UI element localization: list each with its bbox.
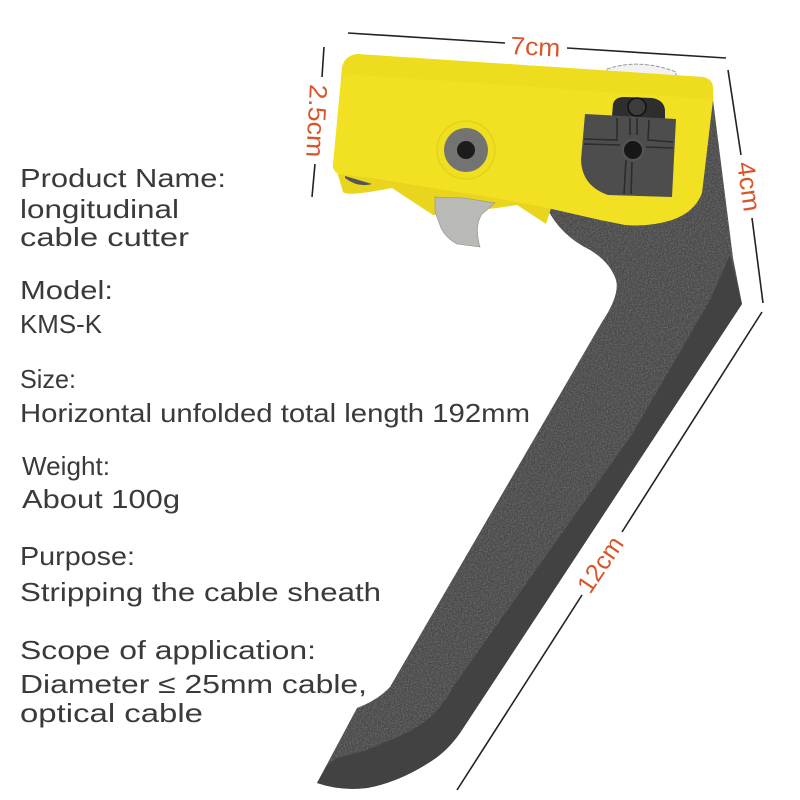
spec text: purpose: Purpose: (20, 541, 135, 571)
dimension: 7cm: 7cm (510, 32, 561, 63)
pivot screw (437, 121, 495, 179)
dimension: 4cm: 4cm (731, 160, 766, 213)
dimension: 2.5cm: 2.5cm (300, 84, 332, 158)
spec text: size: Size: (20, 364, 76, 394)
handle (317, 100, 742, 789)
spec text: scope of application: optical cable (20, 698, 203, 728)
spec text: weight (22, 451, 180, 514)
handle ridge (317, 255, 742, 789)
spec text: size (20, 364, 530, 428)
yellow body (333, 54, 713, 225)
dimension: 7cm (348, 32, 726, 63)
spec text: model (20, 275, 113, 339)
dimension: 12cm (457, 312, 762, 790)
dimension: 12cm: 12cm (572, 531, 630, 598)
blade (435, 197, 495, 247)
spec text: product name: longitudinal (20, 194, 179, 224)
spec text: product name: Product Name: (20, 163, 226, 193)
body top band (341, 54, 713, 100)
spec text: scope of application: Diameter ≤ 25mm cable, (20, 669, 367, 699)
dimension: 2.5cm (300, 47, 332, 197)
blade adjuster plate (581, 97, 676, 197)
spec text: product name: cable cutter (20, 222, 189, 252)
spec text: model: KMS-K (20, 309, 103, 339)
lower jaw (336, 168, 552, 224)
spec text: weight: Weight: (22, 451, 110, 481)
spec text: product name (20, 163, 226, 252)
spec text: scope of application (20, 635, 367, 728)
spec text: scope of application: Scope of application: (20, 635, 316, 665)
spec text: model: Model: (20, 275, 113, 305)
spec text: size: Horizontal unfolded total length 192mm (20, 398, 530, 428)
spec text: purpose: Stripping the cable sheath (20, 577, 381, 607)
jaw shadow pin (345, 176, 372, 185)
thumb wheel (607, 64, 676, 80)
cutter illustration (317, 54, 742, 789)
dimension: 4cm (728, 70, 766, 303)
spec text: weight: About 100g (22, 484, 180, 514)
spec text: purpose (20, 541, 381, 607)
